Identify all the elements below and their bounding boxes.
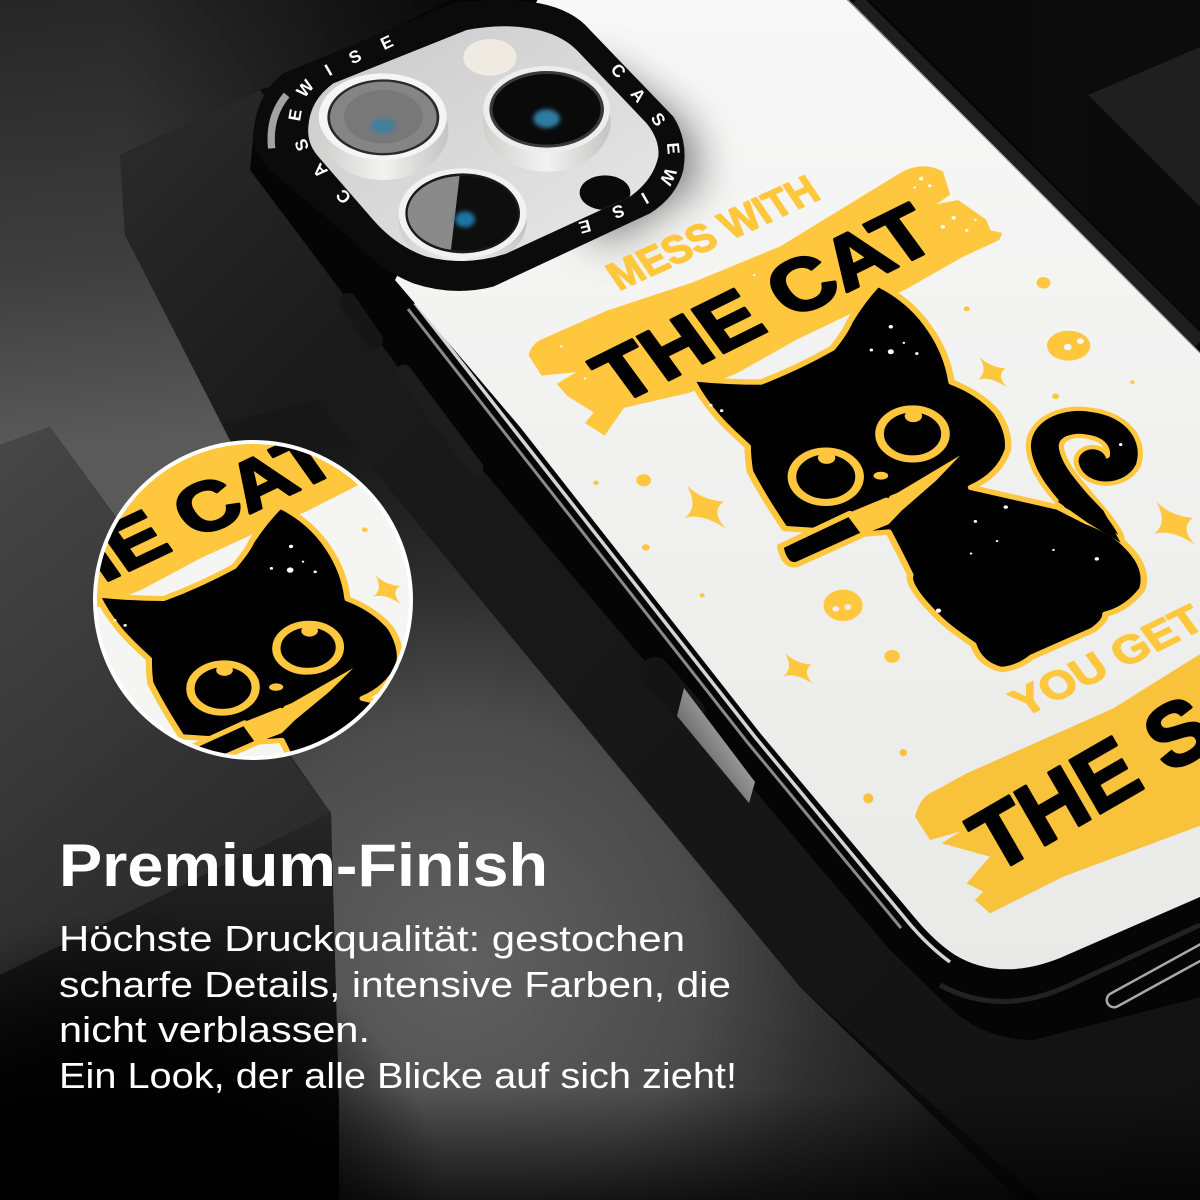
big heading: the cat: THE CAT <box>577 189 951 419</box>
CASEWISE ring text left: S <box>290 136 313 154</box>
CASEWISE ring text right: E <box>663 142 684 155</box>
lens top right <box>483 66 611 172</box>
camera shadow <box>560 60 700 245</box>
CASEWISE ring text left: S <box>346 45 364 68</box>
title: Premium-Finish <box>59 832 548 899</box>
CASEWISE ring text left: E <box>377 31 396 54</box>
CASEWISE ring text left: C <box>331 185 355 208</box>
skull bottom <box>824 590 863 621</box>
charging port <box>1114 950 1200 1000</box>
CASEWISE ring text right: W <box>656 165 681 189</box>
circle: knife blade <box>244 668 353 742</box>
skull top <box>1047 331 1090 361</box>
circle: eye left <box>190 664 257 712</box>
body text: nicht verblassen. <box>59 1009 370 1050</box>
zoom circle callout <box>93 440 413 760</box>
phone case body <box>250 0 1200 1040</box>
body text: scharfe Details, intensive Farben, die <box>59 964 731 1005</box>
body text: Höchste Druckqualität: gestochen <box>59 918 685 959</box>
decorative dots <box>593 277 1135 663</box>
circle: mouth <box>280 706 285 708</box>
star upper right <box>978 357 1007 387</box>
artwork: lower banner <box>863 650 1200 913</box>
banner grain <box>560 177 977 380</box>
camera plate and lenses <box>308 26 658 261</box>
camera island <box>253 0 685 291</box>
yellow banner top <box>529 166 1002 436</box>
body text <box>59 918 737 1096</box>
cat eye left <box>792 451 860 502</box>
CASEWISE ring text left: W <box>292 75 318 101</box>
knife blade <box>850 455 960 534</box>
star left <box>685 486 726 529</box>
cat nose <box>873 472 888 480</box>
body text: Ein Look, der alle Blicke auf sich zieht! <box>59 1055 737 1096</box>
circle: cat silhouette <box>100 510 402 753</box>
island frame <box>253 0 685 291</box>
circle: eye right <box>275 624 341 671</box>
CASEWISE ring text right: S <box>609 200 627 223</box>
circle: dot <box>362 527 368 532</box>
star right <box>1154 502 1195 545</box>
cat mouth <box>867 471 895 498</box>
artwork: cat with knife and banner <box>529 166 1200 725</box>
circle: nose <box>269 683 283 691</box>
CASEWISE ring text left: I <box>321 60 335 80</box>
banner shape <box>915 650 1200 913</box>
circle: speckles <box>113 544 318 627</box>
lens bottom <box>399 167 527 267</box>
cat tail base fill <box>1058 486 1121 543</box>
flash <box>463 39 517 76</box>
circle border <box>95 442 411 758</box>
cat tail <box>1045 422 1124 539</box>
frame inner highlight <box>271 95 287 148</box>
cat silhouette <box>691 284 1144 670</box>
circle: knife handle <box>192 720 260 755</box>
CASEWISE ring text left: E <box>284 108 306 122</box>
lens top left <box>318 73 448 180</box>
circle: star <box>373 575 402 604</box>
microphone hole <box>580 175 630 210</box>
fur speckles <box>709 325 1122 613</box>
small dots <box>863 749 907 803</box>
CASEWISE ring text right: E <box>577 216 593 238</box>
CASEWISE ring text left <box>284 31 396 208</box>
CASEWISE ring text right: A <box>627 84 650 107</box>
CASEWISE ring text right: C <box>607 59 630 82</box>
cat eye right <box>880 409 945 459</box>
CASEWISE ring text right <box>577 59 684 238</box>
CASEWISE ring text left: A <box>308 159 331 182</box>
side buttons <box>348 302 755 803</box>
circle: banner <box>97 444 358 608</box>
small heading: mess with: MESS WITH <box>598 167 828 299</box>
CASEWISE ring text right: I <box>638 188 652 208</box>
CASEWISE ring text right: S <box>647 109 670 130</box>
printed screen area <box>395 0 1200 969</box>
star bottom <box>783 653 813 684</box>
right edge highlight <box>848 0 1200 353</box>
knife handle <box>780 514 865 565</box>
